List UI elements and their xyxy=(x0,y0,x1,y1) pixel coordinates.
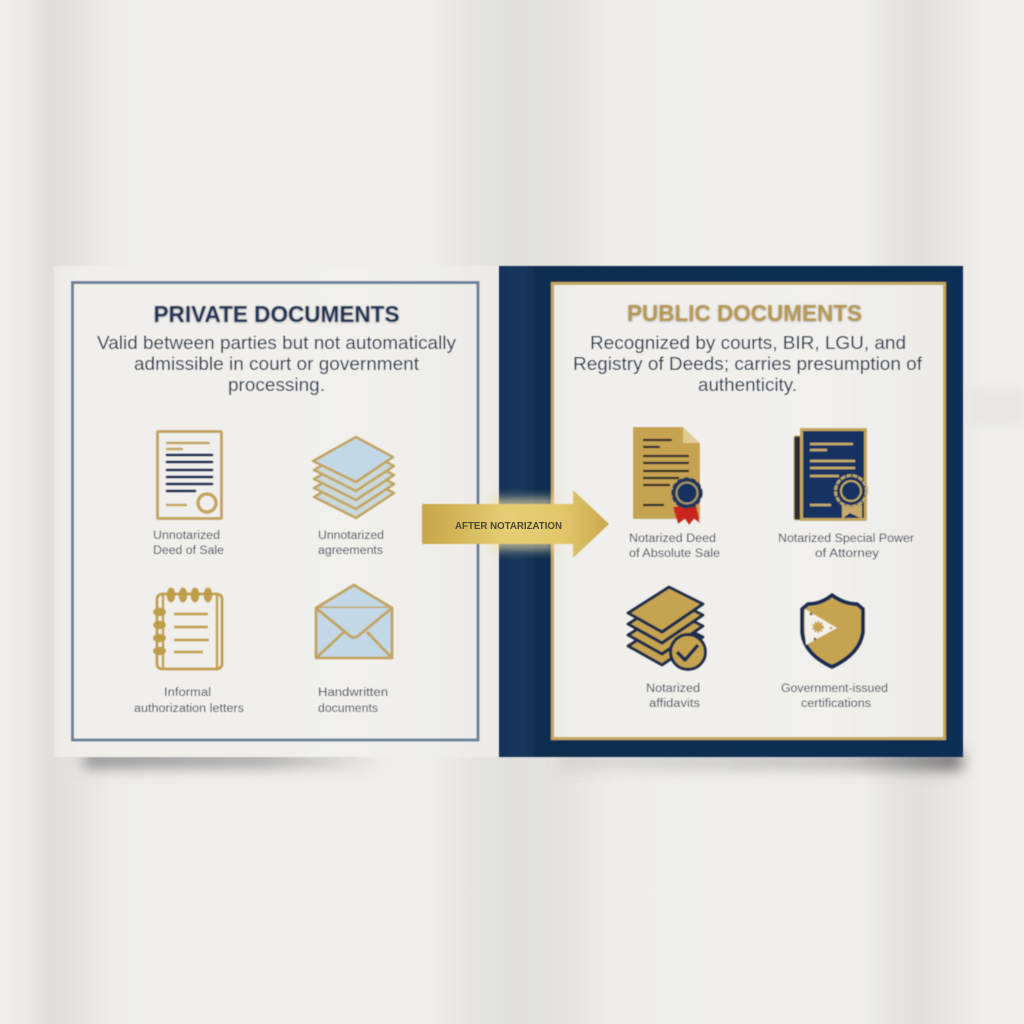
label: handwritten documents xyxy=(318,687,388,715)
navy cover xyxy=(499,266,963,757)
label: notarized deed xyxy=(629,533,720,560)
label: handwritten documents: documents xyxy=(318,703,378,715)
private description: processing. xyxy=(228,375,325,395)
label: government certifications: Government-issued xyxy=(781,683,888,695)
arrow label: AFTER NOTARIZATION xyxy=(455,520,562,532)
public description: Recognized by courts, BIR, LGU, and xyxy=(590,333,906,353)
label: unnotarized deed: Unnotarized xyxy=(153,530,220,542)
icon: notarized deed xyxy=(633,427,702,525)
label: notarized deed: of Absolute Sale xyxy=(629,548,720,560)
heading: public documents: PUBLIC DOCUMENTS xyxy=(627,300,862,326)
private paper sheet xyxy=(54,266,499,757)
panel: public documents xyxy=(499,266,963,757)
private frame xyxy=(72,282,478,740)
panel: private documents xyxy=(54,266,499,757)
icon: government shield xyxy=(802,595,863,667)
label: informal letters xyxy=(134,687,244,715)
label: notarized deed: Notarized Deed xyxy=(629,533,716,545)
label: unnotarized deed: Deed of Sale xyxy=(153,545,224,557)
label: notarized power of attorney xyxy=(778,533,914,560)
label: notarized affidavits xyxy=(646,683,700,710)
public description: authenticity. xyxy=(698,375,797,395)
icon: envelope xyxy=(316,585,392,658)
icon: unnotarized agreements stack xyxy=(313,437,394,518)
label: informal letters: Informal xyxy=(164,687,211,699)
icon: unnotarized deed xyxy=(158,432,222,518)
arrow: after notarization xyxy=(422,490,609,558)
private description: admissible in court or government xyxy=(134,354,419,374)
arrow glow xyxy=(490,498,555,550)
arrow body xyxy=(422,490,609,558)
public description xyxy=(573,333,923,395)
icon: notebook xyxy=(153,588,222,669)
label: government certifications: certifications xyxy=(801,698,871,710)
label: unnotarized agreements xyxy=(318,530,384,557)
private description: Valid between parties but not automatically xyxy=(97,333,457,353)
gold framed sheet xyxy=(552,284,944,738)
label: notarized affidavits: affidavits xyxy=(649,698,700,710)
icon: notarized power of attorney xyxy=(794,430,866,520)
heading: private documents: PRIVATE DOCUMENTS xyxy=(154,301,400,327)
icon: notarized affidavits xyxy=(628,587,706,670)
label: informal letters: authorization letters xyxy=(134,703,244,715)
label: government certifications xyxy=(781,683,888,710)
private description xyxy=(97,333,457,395)
label: handwritten documents: Handwritten xyxy=(318,687,388,699)
public description: Registry of Deeds; carries presumption of xyxy=(573,354,923,374)
label: notarized affidavits: Notarized xyxy=(646,683,700,695)
label: unnotarized agreements: Unnotarized xyxy=(318,530,384,542)
label: notarized power of attorney: of Attorney xyxy=(815,548,879,560)
label: unnotarized agreements: agreements xyxy=(318,545,383,557)
label: notarized power of attorney: Notarized Special Power xyxy=(778,533,914,545)
label: unnotarized deed xyxy=(153,530,224,557)
paper shadow xyxy=(84,752,962,770)
